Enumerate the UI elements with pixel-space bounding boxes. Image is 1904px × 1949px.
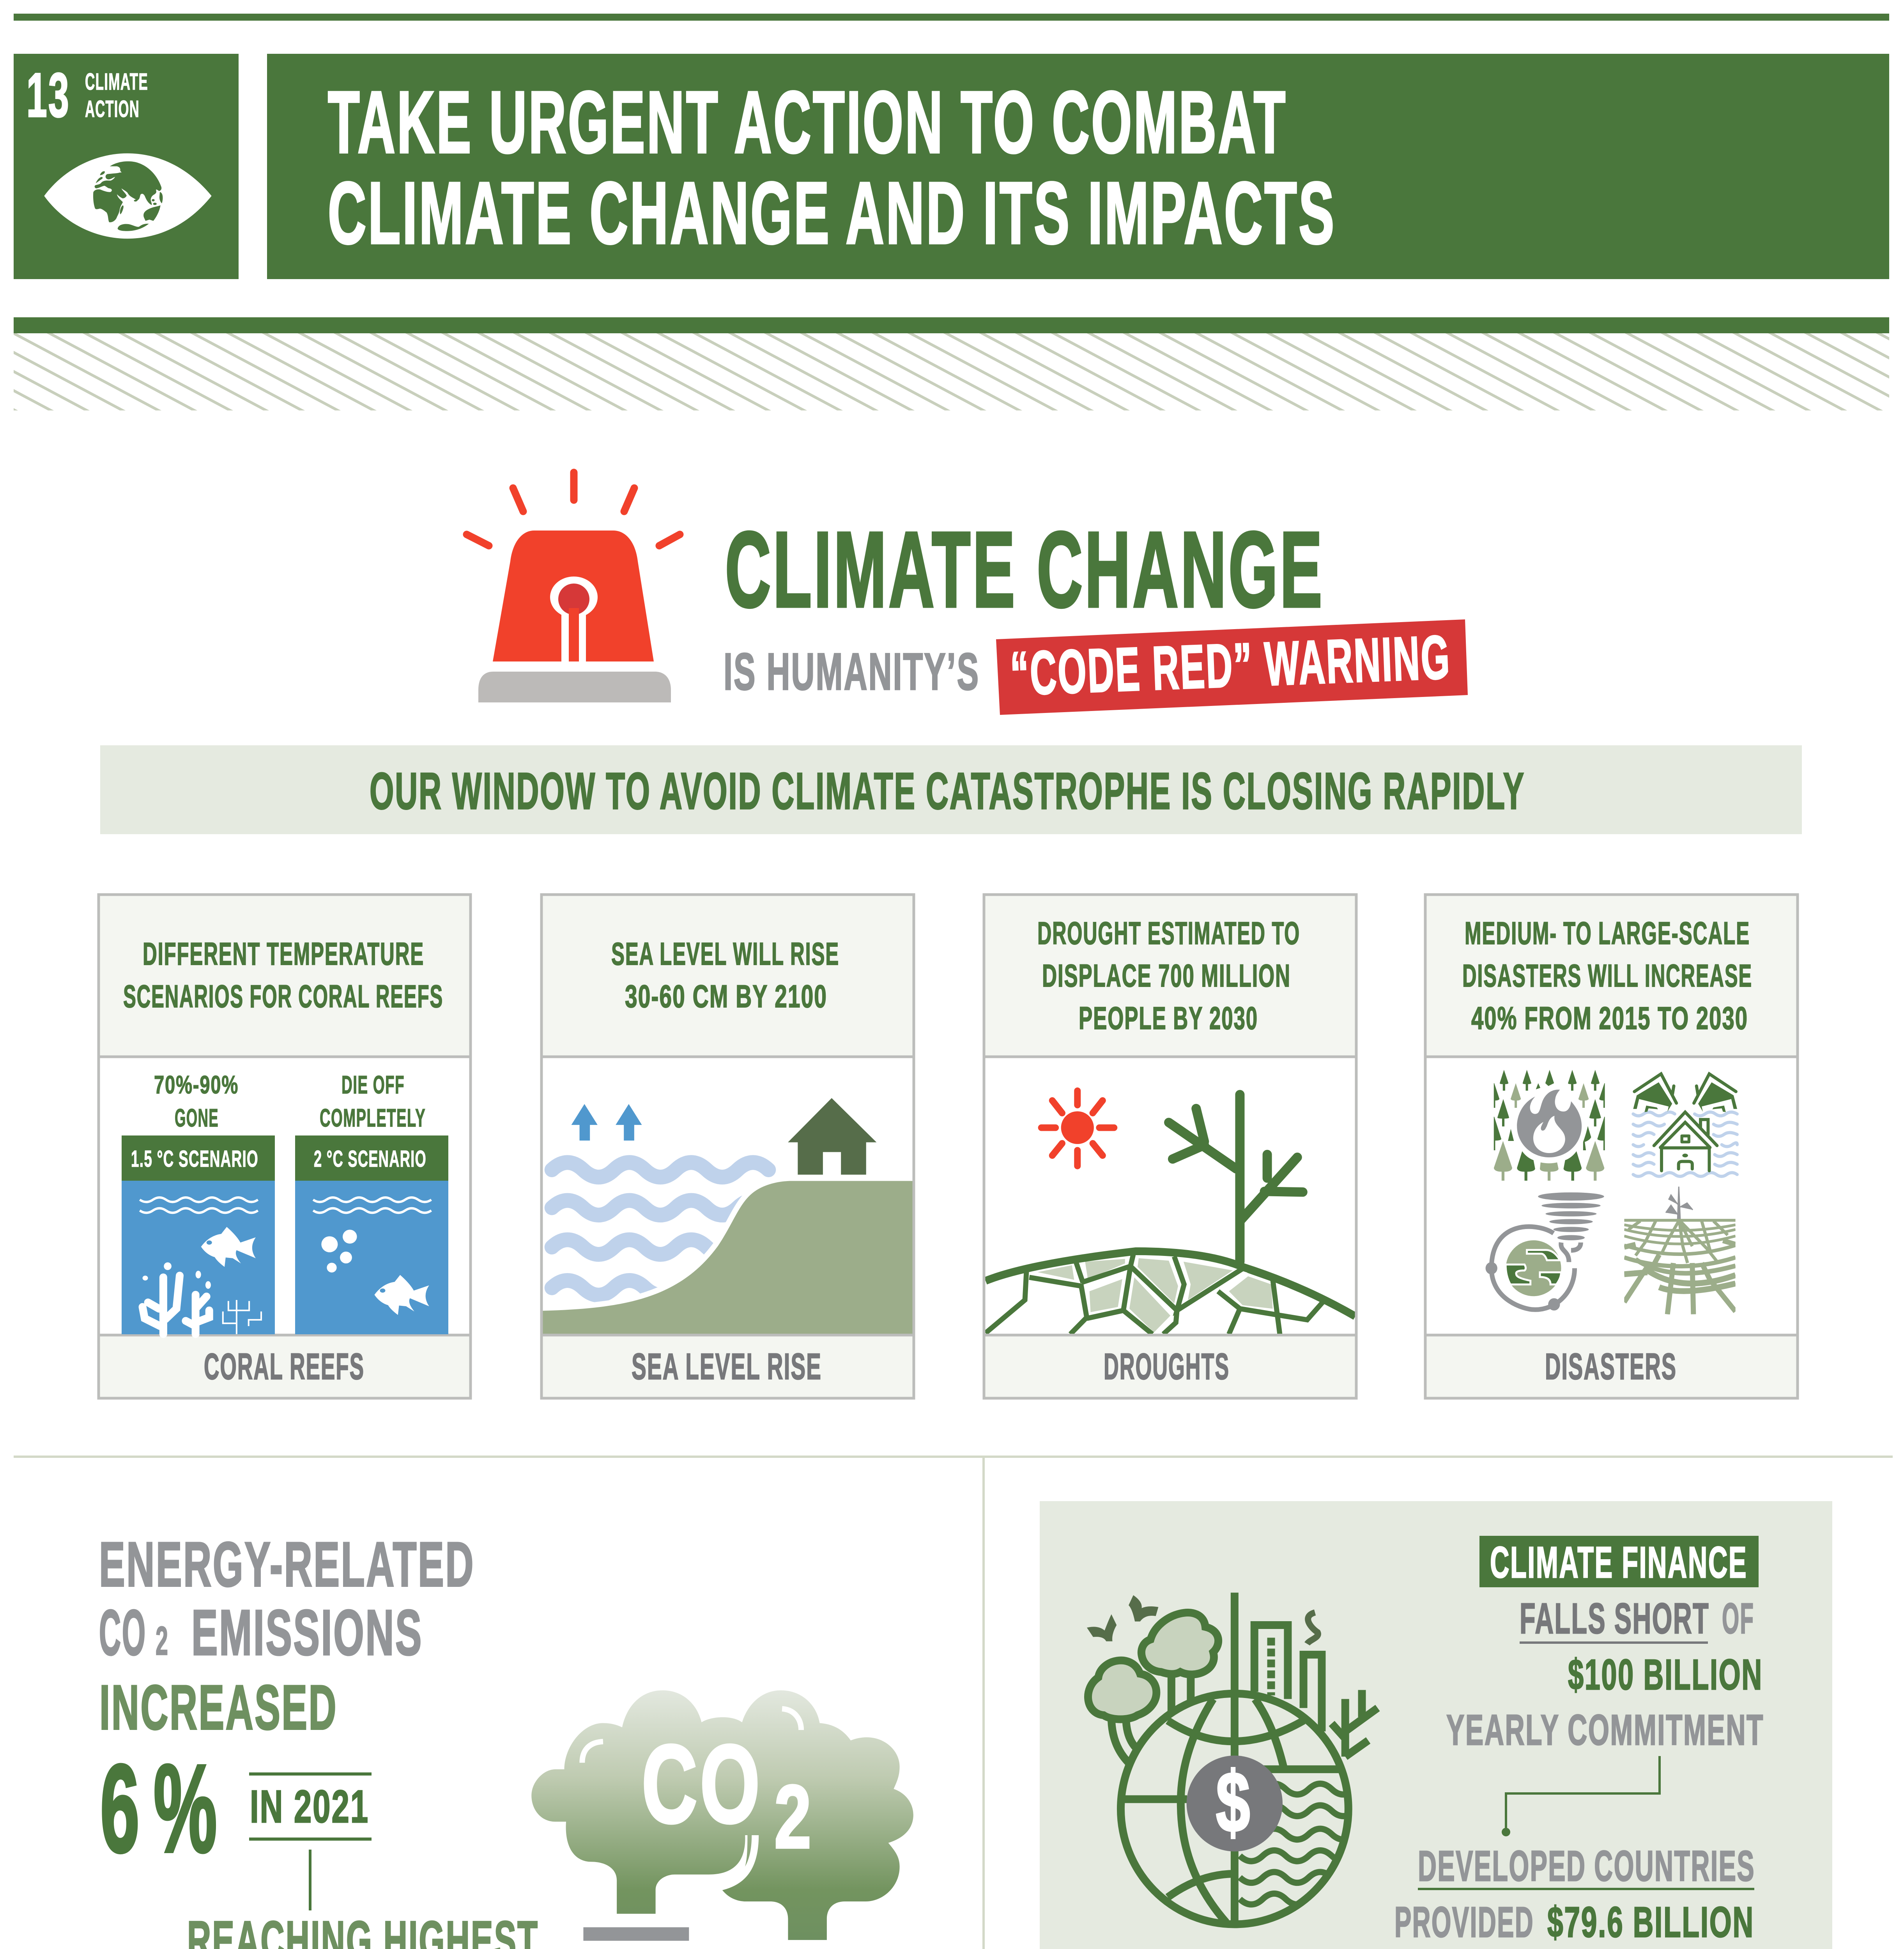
illustration: CO2 cooling towers (99, 1690, 982, 1949)
2C scenario panel (295, 1135, 448, 1334)
goal name: CLIMATE (85, 69, 148, 95)
window band (100, 745, 1802, 834)
icon: forest fire (1494, 1070, 1605, 1181)
CO2 label: 2 (774, 1767, 814, 1867)
1.5C scenario panel (122, 1135, 275, 1334)
panel: emissions text: EMISSIONS (191, 1597, 423, 1668)
70-90 label (154, 1070, 239, 1132)
icon: cracked earth (1624, 1187, 1736, 1314)
disasters heading: 40% FROM 2015 TO 2030 (1471, 1001, 1748, 1036)
falls short text: FALLS SHORT (1520, 1595, 1709, 1643)
developed countries text: $79.6 BILLION (1547, 1898, 1754, 1946)
coral heading: SCENARIOS FOR CORAL REEFS (123, 979, 443, 1014)
drought heading (1037, 916, 1300, 1036)
in 2021 label (249, 1772, 372, 1841)
title banner: TAKE URGENT ACTION TO COMBAT (328, 73, 1287, 171)
die off label: DIE OFF (342, 1070, 405, 1099)
panel: coral reefs (99, 895, 471, 1398)
coral footer: CORAL REEFS (204, 1346, 365, 1387)
icon: flood (1633, 1074, 1737, 1176)
developed countries text: PROVIDED (1394, 1898, 1534, 1946)
6 percent figure: 6 (100, 1739, 142, 1878)
heading: climate change: CLIMATE CHANGE (725, 510, 1324, 630)
disasters icons (1486, 1070, 1737, 1314)
sea level footer: SEA LEVEL RISE (632, 1346, 822, 1387)
icon: tornado and storm (1486, 1192, 1604, 1311)
panel: sea level (541, 895, 914, 1398)
70-90 label: GONE (175, 1104, 219, 1132)
6 percent figure (100, 1739, 219, 1878)
code red banner (996, 619, 1468, 715)
70-90 label: 70%-90% (154, 1070, 239, 1099)
subheading: IS HUMANITY’S (724, 643, 980, 701)
panel: emissions text: CO (99, 1597, 147, 1668)
drought footer: DROUGHTS (1104, 1346, 1230, 1387)
SDG 13 badge (14, 54, 239, 279)
sea level illustration (542, 1098, 913, 1334)
drought heading: DROUGHT ESTIMATED TO (1037, 916, 1300, 951)
title banner (267, 54, 1889, 279)
2C scenario panel: 2 °C SCENARIO (314, 1146, 426, 1172)
waves in globe (1240, 1784, 1355, 1905)
sea level heading (611, 936, 839, 1014)
6 percent figure: % (154, 1739, 219, 1878)
falls short text: OF (1722, 1595, 1754, 1643)
falls short text (1446, 1595, 1764, 1754)
coral heading (123, 936, 443, 1014)
goal name (85, 69, 148, 122)
drought heading: PEOPLE BY 2030 (1079, 1001, 1258, 1036)
drought illustration (986, 1091, 1355, 1334)
panel: emissions text: INCREASED (99, 1672, 338, 1743)
top rule (14, 14, 1889, 21)
panel: climate finance (1040, 1501, 1832, 1949)
in 2021 label: IN 2021 (250, 1781, 369, 1832)
goal number: 13 (27, 60, 70, 130)
sea level heading: SEA LEVEL WILL RISE (611, 936, 839, 972)
falls short text: $100 BILLION (1568, 1651, 1763, 1699)
icon: globe with dollar (1087, 1593, 1378, 1926)
icon: globe with dollar: $ (1216, 1754, 1252, 1850)
coral heading: DIFFERENT TEMPERATURE (143, 936, 424, 972)
panel: emissions text (99, 1529, 539, 1949)
die off label (320, 1070, 426, 1132)
panel: emissions text: 2 (156, 1618, 169, 1664)
panel: emissions text: ENERGY-RELATED (99, 1529, 475, 1600)
CO2 label: CO (642, 1722, 763, 1846)
disasters footer: DISASTERS (1545, 1346, 1677, 1387)
die off label: COMPLETELY (320, 1104, 426, 1132)
drought heading: DISPLACE 700 MILLION (1042, 958, 1291, 994)
code red banner: “CODE RED” WARNING (1009, 623, 1452, 708)
panel: disasters (1425, 895, 1798, 1398)
connector arrow (1502, 1756, 1660, 1836)
panel: droughts (984, 895, 1356, 1398)
climate finance tag: CLIMATE FINANCE (1490, 1538, 1747, 1587)
disasters heading (1462, 916, 1752, 1036)
icon: red siren (467, 472, 680, 702)
icon: eye with globe (44, 153, 212, 239)
sea level heading: 30-60 CM BY 2100 (625, 979, 827, 1014)
developed countries text (1333, 1842, 1755, 1949)
1.5C scenario panel: 1.5 °C SCENARIO (131, 1146, 258, 1172)
climate finance tag (1479, 1536, 1759, 1587)
goal name: ACTION (85, 96, 140, 122)
